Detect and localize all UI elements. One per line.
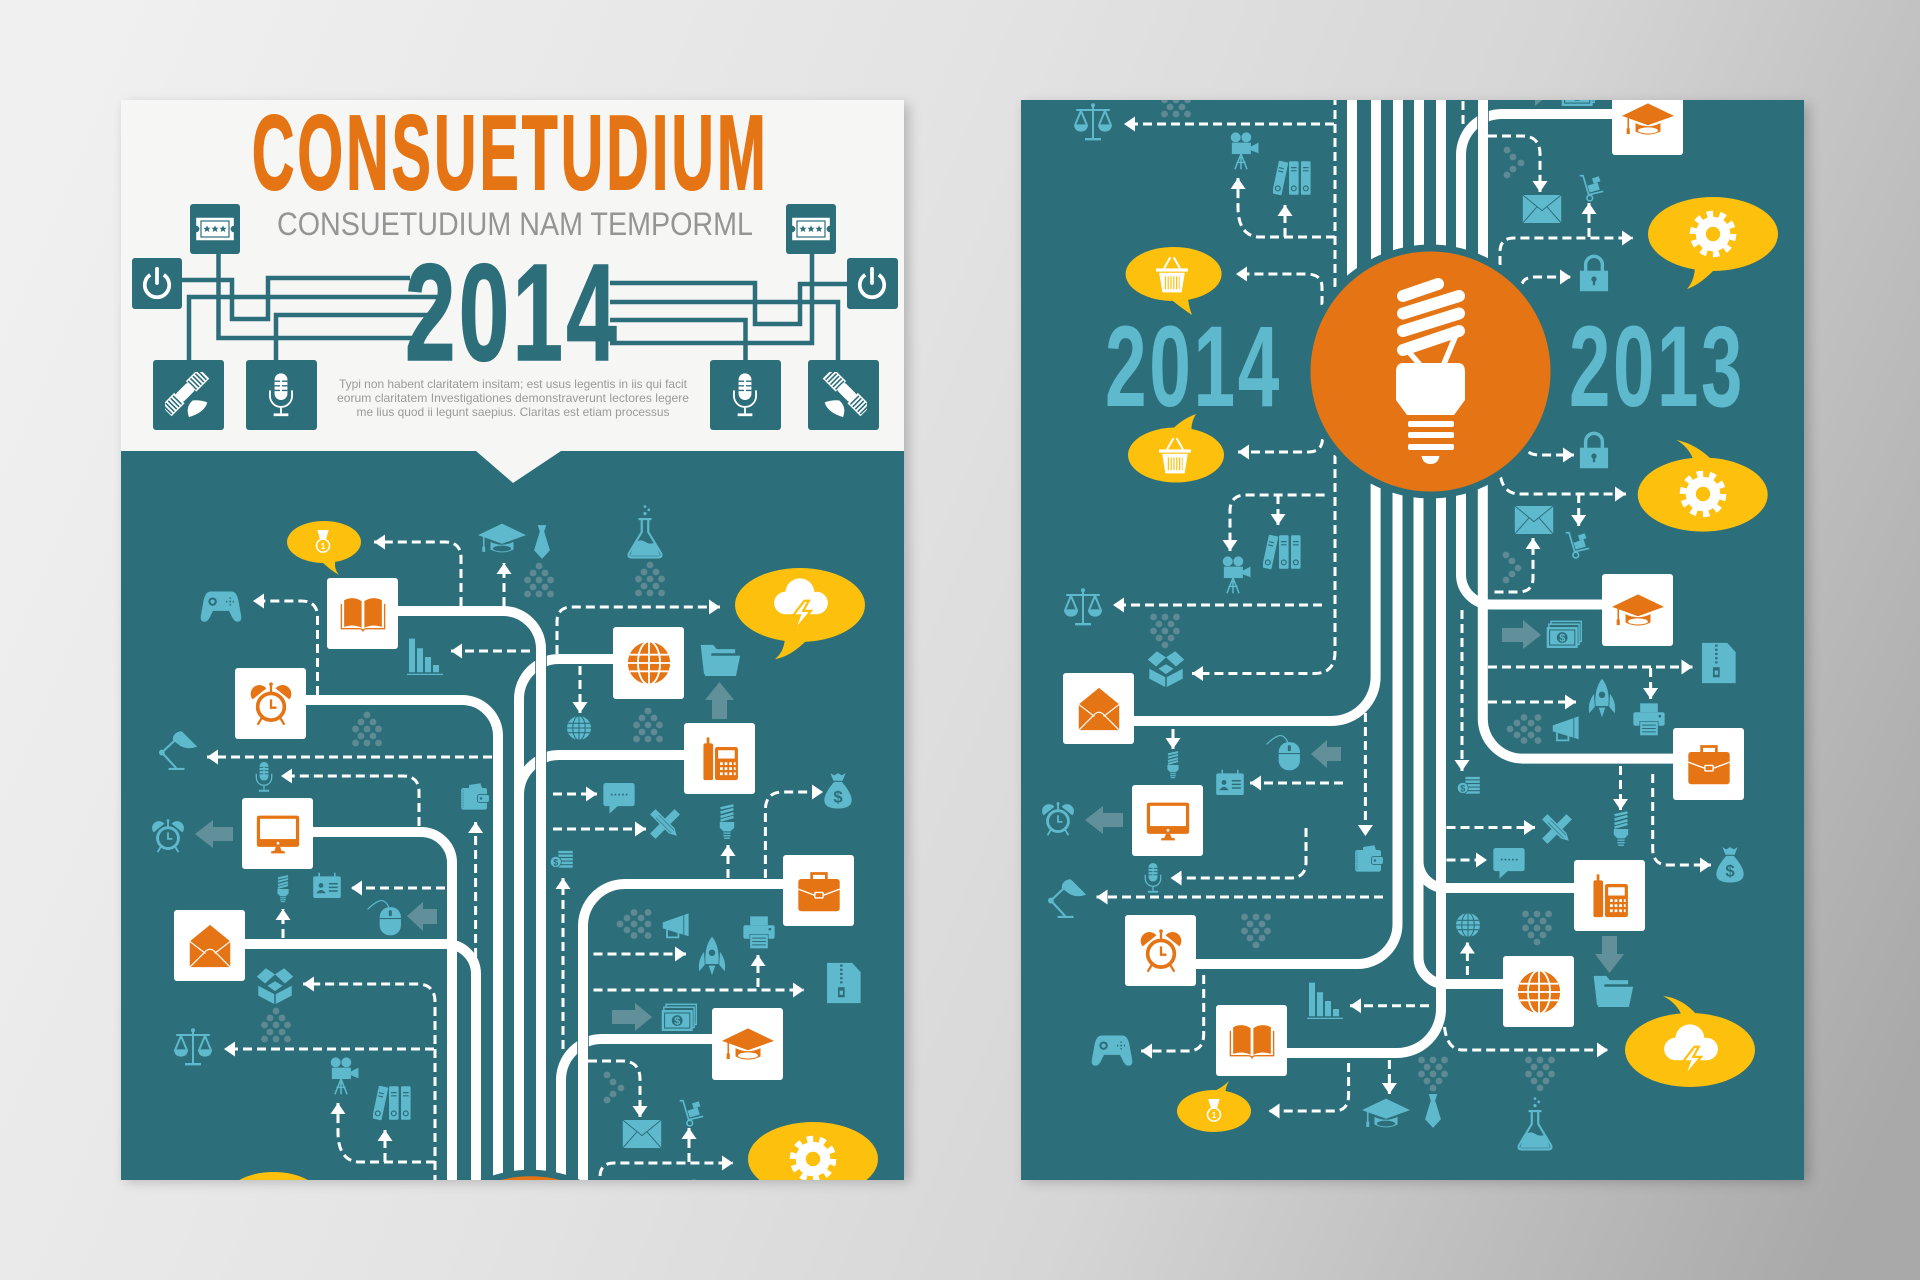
icon: box bbox=[1148, 651, 1184, 687]
icon: rocket bbox=[699, 937, 725, 975]
icon: bulb bbox=[720, 805, 734, 838]
icon: light bulb bbox=[1396, 284, 1465, 464]
icon: book bbox=[341, 598, 385, 631]
icon: wallet bbox=[1355, 845, 1383, 872]
panel shadows bbox=[125, 104, 1809, 1182]
icon: alarm clock bbox=[1042, 802, 1074, 835]
icon: megaphone bbox=[1553, 716, 1579, 740]
icon: cash bbox=[1547, 621, 1581, 648]
icon: mail bbox=[623, 1120, 661, 1148]
icon: gamepad bbox=[201, 592, 241, 622]
icon: graduation cap bbox=[478, 524, 526, 552]
icon: clock bbox=[1141, 929, 1181, 972]
panel: left brochure page header bbox=[121, 94, 904, 490]
icon tiles: header diagram bbox=[132, 204, 898, 430]
tree diagram: right page upper half bbox=[1052, 0, 1778, 353]
icon: desk lamp bbox=[1048, 879, 1086, 917]
dashed arrows: right page lower half bbox=[1096, 439, 1711, 1111]
speech bubble: lower storm cloud bbox=[1625, 996, 1755, 1087]
speech bubble: storm cloud bbox=[735, 568, 865, 659]
intro paragraph bbox=[337, 378, 689, 419]
icon: camera bbox=[331, 1057, 358, 1094]
icon: mouse bbox=[1267, 736, 1300, 770]
intro paragraph: Typi non habent claritatem insitam; est usus legentis in iis qui facit bbox=[339, 378, 688, 391]
icon: small globe bbox=[1456, 913, 1480, 937]
icon: tie bbox=[1425, 1094, 1441, 1128]
icon: pencils bbox=[650, 809, 680, 839]
icon: telephone bbox=[1593, 874, 1628, 917]
icon: bulb bbox=[1614, 812, 1628, 845]
icon: briefcase bbox=[798, 874, 840, 911]
icon: id card bbox=[1216, 770, 1244, 795]
icon: flask bbox=[1519, 1097, 1551, 1149]
icon: microphone bbox=[256, 762, 272, 792]
subtitle: CONSUETUDIUM NAM TEMPORML bbox=[277, 206, 753, 242]
icon: small bulb bbox=[277, 876, 289, 902]
grey block arrows: right page bbox=[1085, 620, 1624, 973]
icon: graduation cap bbox=[1362, 1099, 1410, 1127]
icon: binders bbox=[372, 1086, 411, 1120]
icon: mortarboard bbox=[722, 1028, 774, 1060]
icon: flask bbox=[629, 505, 661, 557]
icon: mail bbox=[1515, 506, 1553, 534]
icon: gamepad bbox=[1092, 1036, 1132, 1066]
speech bubble: lower gear bbox=[1638, 440, 1768, 532]
dot clusters: right page bbox=[1150, 552, 1555, 1091]
thick white branch lines: right page lower half bbox=[1134, 400, 1673, 1053]
thick white branch lines bbox=[245, 611, 783, 1278]
icon: money bag bbox=[1716, 847, 1744, 882]
icon: lower lock bbox=[1580, 433, 1608, 468]
icon: bar chart bbox=[1307, 983, 1343, 1019]
icon: bar chart bbox=[407, 639, 443, 675]
small teal icons: right page lower half bbox=[1042, 433, 1744, 1149]
icon: id card bbox=[313, 873, 341, 898]
speech bubble: gear bbox=[748, 1122, 878, 1214]
icon: camera bbox=[1223, 556, 1250, 593]
icon: globe bbox=[627, 641, 671, 685]
icon: megaphone bbox=[663, 913, 689, 937]
icon: box bbox=[257, 968, 293, 1004]
icon: printer bbox=[1633, 703, 1665, 735]
icon: envelope bbox=[1079, 688, 1119, 730]
icon: envelope bbox=[190, 925, 230, 967]
icon: cash bbox=[662, 1004, 696, 1031]
grey block arrows bbox=[195, 682, 734, 1031]
speech bubble: lower medal bbox=[1177, 1081, 1251, 1132]
icon: folder bbox=[1594, 976, 1633, 1007]
icon: trolley bbox=[1566, 533, 1589, 558]
icon: zip file bbox=[1702, 643, 1736, 683]
icon: lock bbox=[680, 1181, 708, 1216]
icon: chat bbox=[1493, 848, 1525, 879]
icon: rocket bbox=[1589, 679, 1615, 717]
icon: binders bbox=[1262, 535, 1301, 569]
icon: briefcase bbox=[1688, 747, 1730, 784]
speech bubble: lower basket bbox=[1128, 414, 1224, 482]
connector lines: header diagram bbox=[182, 254, 847, 360]
icon: scales bbox=[174, 1028, 212, 1065]
dot clusters bbox=[261, 562, 665, 1103]
icon: globe bbox=[1517, 970, 1561, 1014]
icon: monitor bbox=[1147, 803, 1189, 840]
icon: telephone bbox=[703, 737, 738, 780]
icon: trolley bbox=[680, 1101, 703, 1126]
icon: mouse bbox=[368, 901, 401, 935]
tree diagram: left page bbox=[152, 505, 878, 1180]
icon: chat bbox=[603, 783, 635, 814]
icon: monitor bbox=[257, 816, 299, 853]
icon: alarm clock bbox=[152, 819, 184, 852]
speech bubble: medal bbox=[287, 521, 361, 575]
year label 2014: 2014 bbox=[1105, 303, 1282, 431]
intro paragraph: me lius quod ii legunt saepius. Claritas est etiam processus bbox=[356, 406, 670, 419]
year 2014: 2014 bbox=[405, 236, 620, 390]
white tiles with orange icons: right page lower half bbox=[1063, 574, 1744, 1076]
central circle with light bulb bbox=[1304, 244, 1558, 498]
icon: small globe bbox=[567, 716, 591, 740]
central circle: top edge bbox=[405, 1170, 656, 1278]
dashed arrows bbox=[207, 542, 823, 1230]
icon: desk lamp bbox=[159, 731, 197, 769]
panel: left brochure page teal body bbox=[121, 451, 904, 1180]
icon: mortarboard bbox=[1612, 594, 1664, 626]
icon: zip file bbox=[827, 963, 861, 1003]
icon: coins bbox=[1457, 777, 1480, 794]
icon: printer bbox=[743, 916, 775, 948]
year label 2013: 2013 bbox=[1569, 303, 1745, 431]
icon: scales bbox=[1064, 588, 1102, 625]
icon: small bulb bbox=[1167, 752, 1179, 778]
icon: pencils bbox=[1542, 814, 1572, 844]
small teal icons bbox=[152, 505, 861, 1216]
icon: tie bbox=[534, 525, 550, 559]
title: CONSUETUDIUM bbox=[252, 94, 769, 212]
icon: folder bbox=[701, 645, 740, 676]
icon: wallet bbox=[461, 783, 489, 810]
speech bubble: basket bbox=[226, 1172, 322, 1240]
icon: microphone bbox=[1145, 863, 1161, 893]
icon: coins bbox=[550, 851, 573, 868]
icon: money bag bbox=[824, 773, 852, 808]
panel: right brochure page bbox=[1021, 100, 1804, 1180]
intro paragraph: eorum claritatem Investigationes demonstraverunt lectores legere bbox=[337, 392, 689, 405]
white tiles with orange icons bbox=[174, 578, 854, 1080]
icon: book bbox=[1230, 1025, 1274, 1058]
icon: clock bbox=[251, 682, 291, 725]
